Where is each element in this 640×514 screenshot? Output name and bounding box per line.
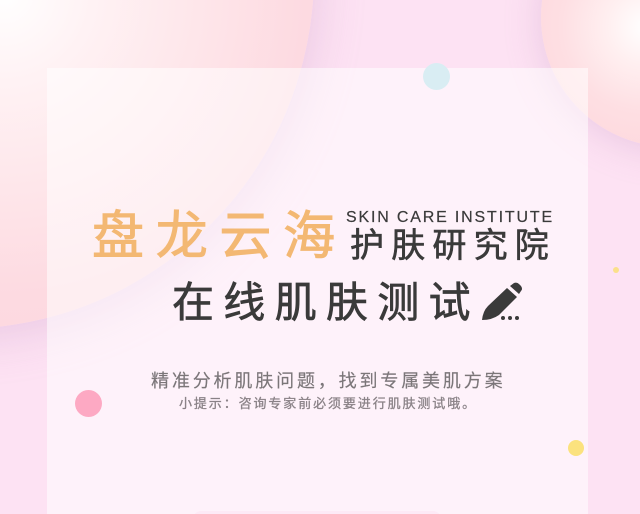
- dot: pink: [75, 390, 102, 417]
- dot: yellow: [568, 440, 584, 456]
- main title: 在线肌肤测试: [172, 279, 480, 326]
- card bottom tab: [193, 511, 441, 514]
- institute name: 护肤研究院: [350, 227, 556, 265]
- brand name: 盘龙云海: [92, 208, 347, 266]
- icon: pencil: [482, 282, 522, 320]
- english subtitle: SKIN CARE INSTITUTE: [346, 209, 554, 226]
- description text: 精准分析肌肤问题，找到专属美肌方案: [151, 371, 505, 391]
- decorative circle: top left: [0, 0, 314, 329]
- translucent card panel: [47, 68, 588, 514]
- dot: small yellow: [613, 267, 619, 273]
- dot: teal: [423, 63, 450, 90]
- tip text: 小提示：咨询专家前必须要进行肌肤测试哦。: [179, 396, 477, 411]
- decorative circle: top right: [541, 0, 640, 147]
